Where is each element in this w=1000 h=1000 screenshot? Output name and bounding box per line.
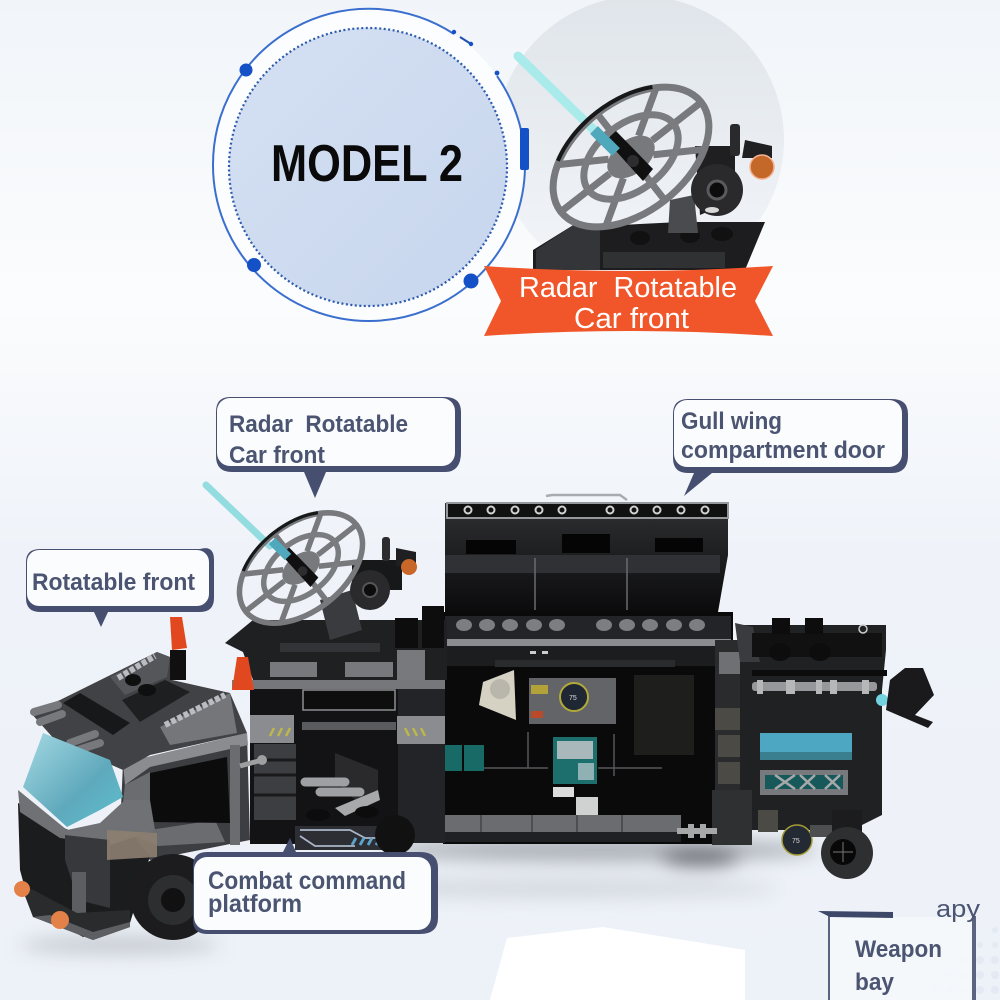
windshield bbox=[23, 733, 123, 827]
model badge bbox=[213, 9, 529, 321]
lower cab and grille bbox=[18, 803, 150, 937]
blue window bbox=[760, 733, 852, 760]
roof bbox=[30, 652, 247, 770]
badge 75 bbox=[782, 825, 812, 855]
callout: rotatable front bbox=[26, 548, 214, 627]
front wheel bbox=[130, 854, 216, 940]
white floor patch bbox=[490, 927, 745, 1000]
orange ribbon banner bbox=[484, 266, 773, 336]
main compartment bbox=[443, 612, 733, 844]
wand bbox=[206, 485, 270, 546]
stowed guns bbox=[305, 753, 380, 816]
red beacons bbox=[170, 617, 254, 690]
halftone dots corner bbox=[931, 927, 999, 994]
callout: weapon bay: apy bbox=[936, 896, 980, 923]
hinge bbox=[752, 682, 877, 691]
title: MODEL 2 bbox=[271, 135, 463, 193]
callout: weapon bay: Weapon bbox=[855, 936, 942, 963]
icon: side dish bbox=[691, 164, 743, 216]
badge 75: 75 bbox=[792, 838, 800, 845]
deck under radar bbox=[533, 146, 765, 270]
inset: radar close-up circle bbox=[496, 0, 784, 284]
callout: radar rotatable: Car front bbox=[229, 442, 325, 469]
radar wand bbox=[518, 56, 600, 136]
outer ring bbox=[213, 9, 525, 321]
radar wheel bbox=[525, 57, 736, 257]
vehicle: trailer mid-section with open gull-wing door bbox=[431, 495, 733, 844]
callout: combat command platform: platform bbox=[208, 890, 302, 918]
callout: radar rotatable: Radar Rotatable bbox=[229, 411, 408, 438]
vehicle: rear section bbox=[677, 618, 934, 879]
vent grate bbox=[760, 770, 848, 795]
raised door bbox=[445, 495, 728, 612]
callout: weapon bay: bay bbox=[855, 969, 895, 996]
icon: orange lamp bbox=[730, 124, 774, 179]
callout: combat command platform bbox=[193, 838, 438, 934]
rear gun bbox=[876, 668, 934, 728]
orange ribbon banner: Radar Rotatable bbox=[519, 272, 737, 304]
callout: weapon bay bbox=[818, 896, 980, 1000]
cab side bbox=[120, 733, 250, 860]
callout: combat command platform: Combat command bbox=[208, 867, 406, 895]
orange ribbon banner: Car front bbox=[574, 303, 689, 335]
callout: rotatable front: Rotatable front bbox=[32, 569, 195, 596]
callout: radar rotatable bbox=[216, 397, 461, 498]
floor strip bbox=[431, 815, 681, 842]
platform panel bbox=[295, 826, 395, 850]
side dish and lamp bbox=[320, 537, 417, 640]
vehicle: radar deck and front bay bbox=[225, 606, 447, 855]
wheel bbox=[218, 489, 384, 647]
vehicle: cab bbox=[14, 617, 267, 940]
roof guns bbox=[34, 705, 100, 750]
ground shadow bbox=[20, 838, 820, 954]
interior panels: 75 bbox=[569, 695, 577, 702]
rear wheel bbox=[810, 810, 873, 879]
dotted disc bbox=[229, 28, 507, 306]
radar on vehicle bbox=[206, 485, 417, 647]
interior panels bbox=[444, 670, 694, 815]
callout: gull wing door bbox=[673, 399, 908, 496]
tail hinges bbox=[677, 824, 717, 838]
callout: gull wing door: compartment door bbox=[681, 437, 885, 464]
callout: gull wing door: Gull wing bbox=[681, 408, 782, 435]
studded ledge bbox=[443, 616, 731, 667]
bumper lights bbox=[14, 881, 69, 929]
